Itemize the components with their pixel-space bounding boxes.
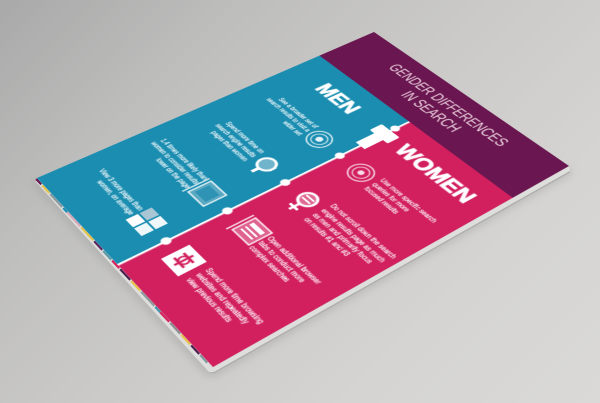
icon: person figure — [351, 120, 408, 153]
text: women tabs: tabs to conduct more — [256, 239, 308, 284]
timeline divider — [115, 119, 412, 268]
icon: target men — [301, 128, 337, 151]
panel: men — [37, 56, 409, 265]
text: men search time: search engine results — [214, 122, 259, 158]
text: women tabs: complex searches — [247, 244, 293, 283]
text: women queries: focused results — [362, 185, 402, 215]
heading: women: WOMEN — [389, 141, 482, 207]
title: IN SEARCH — [397, 89, 465, 135]
text: men target: See a broader set of — [277, 97, 321, 129]
text: men target: search results to visit a — [265, 97, 313, 133]
text: men search time: Spend more time on — [224, 120, 268, 154]
text: women queries: Use more specific search — [378, 177, 440, 224]
text: women scrolling — [302, 203, 399, 265]
text: women browsing: view previous results — [184, 276, 235, 324]
text: women scrolling: Do not scroll down the search — [328, 203, 399, 260]
icon: linked pages women — [161, 245, 207, 276]
text: women scrolling: as men and primarily focus — [311, 212, 375, 265]
text: women browsing: websites and repeatedly — [194, 271, 252, 325]
panel: women — [118, 122, 513, 367]
text: women scrolling: on results #1 and #3 — [302, 216, 352, 258]
title: GENDER DIFFERENCES — [384, 62, 512, 149]
text: women tabs: Open additional browser — [266, 235, 325, 285]
icon: female magnifier women — [283, 190, 322, 214]
text: women browsing: Spend more time browsing — [204, 266, 268, 325]
text: men search time — [209, 120, 268, 162]
text: men lower results: women to consider results — [149, 140, 202, 185]
heading: men: MEN — [310, 80, 366, 117]
icon: browser women — [226, 215, 273, 247]
text: men search time: pages than women — [209, 130, 251, 162]
text: men pages: View 3 more pages than — [97, 167, 147, 212]
text: women queries: queries for more — [370, 181, 412, 213]
icon: windows grid men — [126, 207, 168, 236]
text: men lower results: 1.4 times more likely than — [159, 137, 211, 181]
text: men target: wider set — [281, 120, 305, 137]
icons and timeline — [116, 121, 410, 277]
text: men lower results: lower on the page — [154, 157, 193, 190]
panel: title band — [319, 32, 569, 198]
icon: magnifier men — [246, 156, 280, 177]
icon: browser men — [182, 179, 227, 208]
icon: target women — [342, 161, 380, 185]
text: women scrolling: engine results page as much — [319, 207, 388, 263]
poster page — [36, 32, 570, 368]
text: men pages: women, on average — [95, 179, 137, 216]
